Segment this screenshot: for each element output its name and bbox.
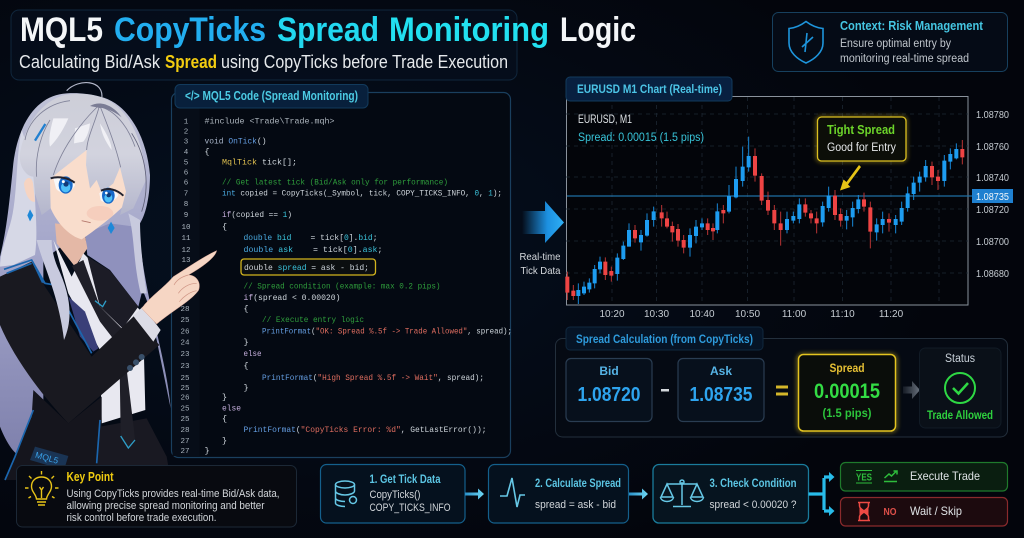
code listing: else (244, 349, 262, 359)
shirt (53, 240, 145, 423)
line numbers: 25 (180, 406, 190, 414)
code listing: PrintFormat("OK: Spread %.5f -> Trade Allowed", spread); (262, 326, 512, 336)
code tab heading: </> MQL5 Code (Spread Monitoring) (185, 89, 358, 103)
code listing: } (244, 338, 249, 348)
x axis labels: 11:20 (879, 309, 904, 320)
current price line (567, 195, 972, 197)
code listing: double ask = tick[0].ask; (244, 245, 382, 255)
callout: tight spread: Tight Spread (827, 123, 895, 137)
badge MQL5: MQL5 (34, 450, 60, 466)
code listing: double bid = tick[0].bid; (244, 233, 378, 243)
outcome: no wait skip (840, 498, 1008, 526)
buttons and crest (127, 354, 145, 371)
status box (920, 348, 1001, 428)
hair highlights (49, 118, 112, 150)
line numbers: 4 (184, 149, 189, 157)
hair shading (25, 101, 135, 177)
current price tag (972, 189, 1013, 203)
context text: monitoring real-time spread (840, 53, 969, 65)
line numbers: 6 (184, 180, 189, 188)
title: CopyTicks (114, 11, 266, 49)
icon: database (336, 481, 356, 506)
icon: light bulb (25, 471, 58, 505)
step 2 text: spread = ask - bid (535, 499, 616, 511)
subtitle: Spread (165, 52, 217, 72)
line numbers: 23 (180, 363, 190, 371)
key point heading: Key Point (66, 470, 114, 484)
line numbers: 12 (181, 247, 191, 255)
code listing: { (244, 304, 249, 314)
equals sign (776, 387, 788, 394)
code listing: // Spread condition (example: max 0.2 pips) (244, 282, 440, 292)
spread result box: (1.5 pips) (822, 406, 872, 420)
chart tab heading: EURUSD M1 Chart (Real-time) (577, 82, 722, 96)
candlesticks (567, 137, 962, 304)
y axis labels: 1.08780 (976, 110, 1009, 121)
bid box (566, 358, 652, 422)
panel: code (172, 84, 512, 458)
icon: check circle (945, 373, 975, 403)
x axis labels: 11:10 (830, 309, 855, 320)
step 1 heading: 1. Get Tick Data (370, 472, 441, 486)
line numbers: 11 (181, 235, 191, 243)
panel: context risk management (772, 12, 1008, 72)
wait skip label: Wait / Skip (910, 504, 962, 518)
bid box: Bid (599, 364, 619, 378)
crown and bangs (20, 94, 146, 215)
left front hair strands (0, 130, 37, 267)
ask box: Ask (710, 364, 732, 378)
subtitle (19, 52, 508, 72)
step 1 text (370, 489, 451, 514)
step 3: check condition (653, 464, 808, 523)
title block (11, 10, 636, 80)
step 3 heading: 3. Check Condition (710, 476, 796, 490)
face (50, 140, 126, 239)
code listing: int copied = CopyTicks(_Symbol, tick, COPY_TICKS_INFO, 0, 1); (222, 188, 502, 198)
panel: spread calculation (556, 327, 1008, 437)
line numbers: 5 (184, 160, 189, 168)
code listing: { (244, 361, 249, 371)
right side hair edge (132, 133, 146, 212)
line numbers: 7 (184, 190, 188, 198)
code listing: if(spread < 0.00020) (244, 293, 340, 303)
x axis labels: 10:40 (689, 309, 715, 320)
spread calc heading (566, 327, 763, 350)
line numbers: 24 (180, 340, 190, 348)
blush (87, 206, 113, 221)
cuff (133, 307, 161, 342)
line numbers: 2 (184, 128, 188, 136)
context text: Ensure optimal entry by (840, 38, 951, 50)
code listing: void OnTick() (204, 136, 266, 146)
arrow: decision branch (808, 472, 834, 516)
bid box: 1.08720 (578, 384, 640, 406)
chart info text: Spread: 0.00015 (1.5 pips) (578, 132, 704, 144)
y axis labels (976, 110, 1009, 280)
character: anime girl pointing at code (0, 83, 217, 480)
code listing: { (222, 414, 227, 424)
code listing: PrintFormat("High Spread %.5f -> Wait", spread); (262, 373, 484, 383)
spread calc heading: Spread Calculation (from CopyTicks) (576, 332, 753, 346)
line numbers: 6 (184, 170, 189, 178)
badge MQL5 (30, 447, 68, 470)
x axis labels: 10:20 (599, 309, 625, 320)
ear and earrings (24, 178, 35, 202)
callout: tight spread: Good for Entry (827, 142, 896, 154)
code listing: else (222, 404, 241, 414)
line numbers: 8 (184, 201, 188, 209)
line numbers: 27 (180, 448, 190, 456)
current price tag: 1.08735 (976, 192, 1009, 203)
chart frame (566, 96, 968, 305)
arrow: real-time tick data: Real-time (520, 251, 561, 263)
y axis labels: 1.08700 (976, 237, 1009, 248)
icon: pulse (500, 478, 525, 507)
yes label: YES (856, 472, 872, 484)
back hair (0, 93, 171, 458)
code listing: if(copied == 1) (222, 210, 292, 220)
spread result box: 0.00015 (814, 380, 880, 403)
title: Logic (560, 11, 636, 49)
step 1: get tick data (320, 464, 465, 523)
highlighted spread line: double spread = ask - bid; (244, 263, 369, 273)
code listing: } (244, 383, 249, 393)
highlighted spread line (241, 259, 376, 275)
line numbers: 26 (180, 394, 190, 402)
status box: Status (945, 353, 975, 365)
chart gridlines (566, 97, 968, 305)
line numbers: 27 (180, 438, 190, 446)
arrow: to status (903, 381, 920, 399)
key point text: risk control before trade execution. (66, 512, 216, 524)
code listing: MqlTick tick[]; (222, 158, 297, 168)
context heading: Context: Risk Management (840, 18, 984, 33)
hair braid accent (35, 124, 45, 141)
line numbers: 9 (184, 212, 188, 220)
line numbers: 1 (184, 118, 189, 126)
code listing: // Execute entry logic (262, 315, 364, 325)
step 1 text: COPY_TICKS_INFO (370, 502, 451, 514)
title (20, 11, 636, 49)
step 1 text: CopyTicks() (370, 489, 420, 501)
hair lock over lapel (37, 240, 70, 340)
chart tab heading (566, 77, 732, 101)
execute trade label: Execute Trade (910, 469, 980, 483)
line numbers: 25 (180, 317, 190, 325)
code listing: } (222, 392, 227, 402)
nose highlight and mouth (82, 221, 91, 223)
y axis labels: 1.08760 (976, 142, 1009, 153)
title: Monitoring (389, 11, 549, 49)
line numbers (180, 118, 191, 456)
icon: scales (660, 480, 704, 506)
chart info text (578, 114, 704, 144)
key point text (66, 488, 280, 524)
x axis labels: 10:30 (644, 309, 669, 320)
arrow: real-time tick data: Tick Data (520, 265, 561, 277)
line numbers: 25 (180, 375, 190, 383)
icon: shield (789, 22, 823, 63)
ask box: 1.08735 (690, 384, 752, 406)
right lapel (87, 257, 138, 328)
code listing: #include <Trade\Trade.mqh> (204, 116, 334, 126)
line numbers: 25 (180, 385, 190, 393)
chart section (566, 77, 1013, 320)
callout: tight spread (817, 117, 906, 161)
status box: Trade Allowed (927, 410, 993, 422)
icon: chart up (884, 471, 897, 482)
title: MQL5 (20, 11, 103, 49)
arrow: real-time tick data (520, 201, 564, 277)
jacket body (5, 390, 102, 480)
y axis labels: 1.08680 (976, 269, 1009, 280)
chart info text: EURUSD, M1 (578, 114, 632, 126)
x axis labels: 10:50 (735, 309, 760, 320)
arrow: step 1 to 2 (465, 488, 484, 500)
code listing: // Get latest tick (Bid/Ask only for performance) (222, 178, 448, 188)
outcome: yes execute trade (840, 462, 1008, 491)
code listing: PrintFormat("CopyTicks Error: %d", GetLastError()); (244, 425, 486, 435)
spread result box (798, 354, 896, 431)
code listing: } (222, 436, 227, 446)
tie (72, 260, 135, 449)
neck (55, 223, 87, 267)
line numbers: 13 (181, 257, 191, 265)
line numbers: 25 (180, 416, 190, 424)
step 2 heading: 2. Calculate Spread (535, 476, 621, 490)
y axis labels: 1.08720 (976, 205, 1009, 216)
line numbers: 3 (184, 138, 189, 146)
arrow: step 2 to 3 (629, 488, 648, 500)
inner shadow (68, 297, 98, 352)
line numbers: 28 (180, 427, 190, 435)
eyes (51, 176, 123, 204)
panel: key point (16, 466, 296, 527)
code listing: } (204, 446, 210, 456)
icon: hourglass (858, 502, 870, 520)
code listing: { (222, 222, 227, 232)
hand pointing (142, 251, 217, 324)
jacket sleeve (0, 262, 159, 423)
step 2: calculate spread (488, 464, 628, 523)
line numbers: 28 (180, 306, 190, 314)
code listing (204, 116, 512, 456)
title: Spread (277, 11, 379, 49)
code tab heading (175, 84, 368, 108)
line numbers: 26 (180, 328, 190, 336)
no label: NO (884, 506, 896, 518)
ask box (678, 358, 764, 422)
hair lock ahoge (67, 83, 102, 99)
code listing: { (204, 147, 210, 157)
x axis labels: 11:00 (782, 309, 807, 320)
line numbers: 23 (180, 351, 190, 359)
key point text: allowing precise spread monitoring and better (66, 500, 265, 512)
subtitle: using CopyTicks before Trade Execution (221, 52, 508, 72)
arrow: callout to candle (840, 165, 861, 190)
minus sign (661, 389, 669, 392)
context text (840, 38, 969, 65)
step 3 text: spread < 0.00020 ? (710, 499, 796, 511)
x axis labels (599, 309, 904, 320)
key point text: Using CopyTicks provides real-time Bid/Ask data, (66, 488, 280, 500)
subtitle: Calculating Bid/Ask (19, 52, 161, 72)
y axis labels: 1.08740 (976, 173, 1009, 184)
spread result box: Spread (830, 361, 864, 375)
line numbers: 10 (181, 224, 191, 232)
